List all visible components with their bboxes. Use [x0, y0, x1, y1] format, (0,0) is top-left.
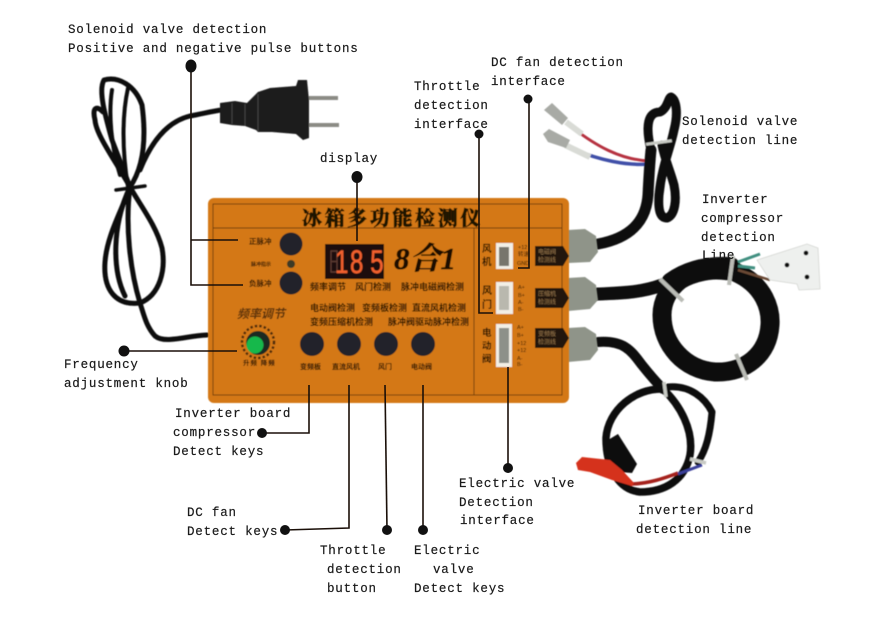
pulse buttons: 正脉冲 [249, 236, 272, 246]
output tags: 检测线 [538, 338, 556, 346]
pin labels: B+ [518, 293, 525, 299]
connector ports [496, 243, 513, 367]
leader: solenoid pulse buttons [186, 60, 243, 285]
output tags [535, 246, 569, 348]
label: electric valve keys [414, 544, 505, 596]
label: inverter board line: detection line [636, 523, 752, 537]
label: electric valve keys: Detect keys [414, 582, 505, 596]
function list: 变频板检测 [362, 302, 407, 313]
pin labels: A- [517, 356, 523, 362]
pin labels: +12 [517, 341, 526, 347]
leader: display [352, 171, 362, 241]
label: inverter board keys [173, 407, 291, 459]
label: DC fan interface: interface [491, 75, 566, 89]
pin labels: B+ [517, 333, 524, 339]
pulse buttons: 脉冲指示 [251, 261, 271, 268]
thick coiled cable [598, 256, 770, 380]
output tags: 检测线 [538, 298, 556, 306]
power cord with plug [94, 79, 339, 340]
label: throttle interface: detection [414, 99, 489, 113]
label: throttle button [320, 544, 402, 596]
port labels: 电 [482, 327, 492, 339]
label: DC fan interface [491, 56, 624, 89]
function list: 脉冲电磁阀检测 [401, 281, 464, 292]
port labels: 门 [482, 298, 492, 311]
pulse buttons: 负脉冲 [249, 278, 272, 288]
function list [310, 281, 469, 327]
pin labels: A- [518, 300, 524, 306]
label: frequency knob: Frequency [64, 358, 139, 372]
pin labels: A+ [518, 285, 525, 291]
label: solenoid pulse buttons: Positive and negative pulse buttons [68, 42, 359, 56]
label: inverter board keys: Detect keys [173, 445, 264, 459]
leader: throttle key [382, 385, 392, 535]
leader: DC fan key [280, 385, 349, 535]
label: electric valve interface: Electric valve [459, 477, 575, 491]
label: solenoid line: Solenoid valve [682, 115, 798, 129]
detect key buttons [300, 332, 435, 371]
pin labels: +12 [517, 348, 526, 354]
port labels: 阀 [482, 353, 492, 365]
port labels: 风 [482, 285, 492, 297]
detect key buttons: 变频板 [300, 362, 321, 371]
port labels: 动 [482, 341, 492, 352]
label: solenoid pulse buttons [68, 23, 359, 56]
function list: 变频压缩机检测 [310, 316, 373, 327]
cable grommets [568, 229, 598, 362]
label: DC fan keys [187, 506, 278, 539]
output tags: 压缩机 [538, 290, 556, 298]
label: inverter compressor line: compressor [701, 212, 784, 226]
label: electric valve interface: Detection [459, 496, 534, 510]
inverter compressor cable [598, 244, 820, 380]
power cord coil [94, 79, 222, 340]
detect key buttons: 电动阀 [411, 362, 432, 371]
label: solenoid line [682, 115, 798, 148]
function list: 风门检测 [355, 281, 391, 292]
label: throttle interface [414, 80, 489, 132]
8 in 1 logo: 8合1 [394, 241, 456, 276]
pin labels [517, 245, 530, 368]
function list: 直流风机检测 [412, 302, 466, 313]
label: inverter board line: Inverter board [638, 504, 754, 518]
white connector [738, 244, 820, 290]
leader: frequency knob [118, 346, 237, 356]
black cable loop [598, 97, 676, 244]
label: inverter compressor line: Line [702, 249, 735, 263]
label: inverter compressor line [701, 193, 784, 263]
label: electric valve keys: valve [433, 563, 475, 577]
frequency knob: 频率调节 [237, 307, 287, 321]
label: solenoid pulse buttons: Solenoid valve detection [68, 23, 267, 37]
function list: 脉冲阀驱动脉冲检测 [388, 316, 469, 327]
label: display: display [320, 152, 378, 166]
label: inverter board keys: compressor [173, 426, 256, 440]
label: electric valve keys: Electric [414, 544, 480, 558]
label: inverter board keys: Inverter board [175, 407, 291, 421]
frequency knob [237, 307, 287, 367]
red crocodile clip [576, 434, 702, 486]
port labels: 风 [482, 244, 492, 255]
pin labels: +12 [518, 245, 527, 251]
pin labels: A+ [517, 325, 524, 331]
leader: throttle interface [474, 130, 493, 313]
function list: 频率调节 [310, 281, 346, 292]
leader: inverter board key [257, 385, 309, 438]
output tags: 检测线 [538, 256, 556, 264]
label: inverter board line [636, 504, 754, 537]
device title: 冰箱多功能检测仪 [302, 206, 483, 230]
label: frequency knob: adjustment knob [64, 377, 189, 391]
label: electric valve interface [459, 477, 575, 528]
pin labels: B- [517, 362, 523, 368]
solenoid valve detection cable [543, 97, 676, 244]
inverter board detection cable [576, 342, 712, 492]
detect key buttons: 风门 [378, 362, 392, 371]
label: DC fan keys: DC fan [187, 506, 237, 520]
port labels [482, 244, 492, 365]
label: frequency knob [64, 358, 189, 391]
pin labels: B- [518, 307, 524, 313]
pulse buttons [249, 232, 302, 294]
output tags: 电磁阀 [538, 248, 556, 256]
label: throttle button: Throttle [320, 544, 386, 558]
port labels: 机 [482, 256, 492, 268]
plug [220, 80, 339, 140]
LED display: 185 [335, 244, 384, 280]
label: throttle interface: interface [414, 118, 489, 132]
terminals and wires [543, 103, 652, 164]
label: throttle interface: Throttle [414, 80, 480, 94]
pin labels: GND [517, 261, 529, 267]
output tags: 变频板 [538, 330, 556, 338]
label: inverter compressor line: Inverter [702, 193, 768, 207]
frequency knob: 升频 降频 [243, 358, 276, 367]
black ring cable [598, 342, 712, 492]
label: throttle button: detection [327, 563, 402, 577]
orange housing [208, 198, 569, 403]
function list: 电动阀检测 [310, 302, 355, 313]
detect key buttons: 直流风机 [332, 362, 360, 371]
device panel [208, 198, 569, 403]
leader: DC fan interface [518, 94, 532, 268]
label: inverter compressor line: detection [701, 231, 776, 245]
label: throttle button: button [327, 582, 377, 596]
label: electric valve interface: interface [460, 514, 535, 528]
pin labels: 转速 [518, 250, 530, 258]
label: DC fan keys: Detect keys [187, 525, 278, 539]
label: DC fan interface: DC fan detection [491, 56, 624, 70]
label: solenoid line: detection line [682, 134, 798, 148]
leader: electric valve interface [503, 367, 513, 473]
leader: electric valve key [418, 385, 428, 535]
